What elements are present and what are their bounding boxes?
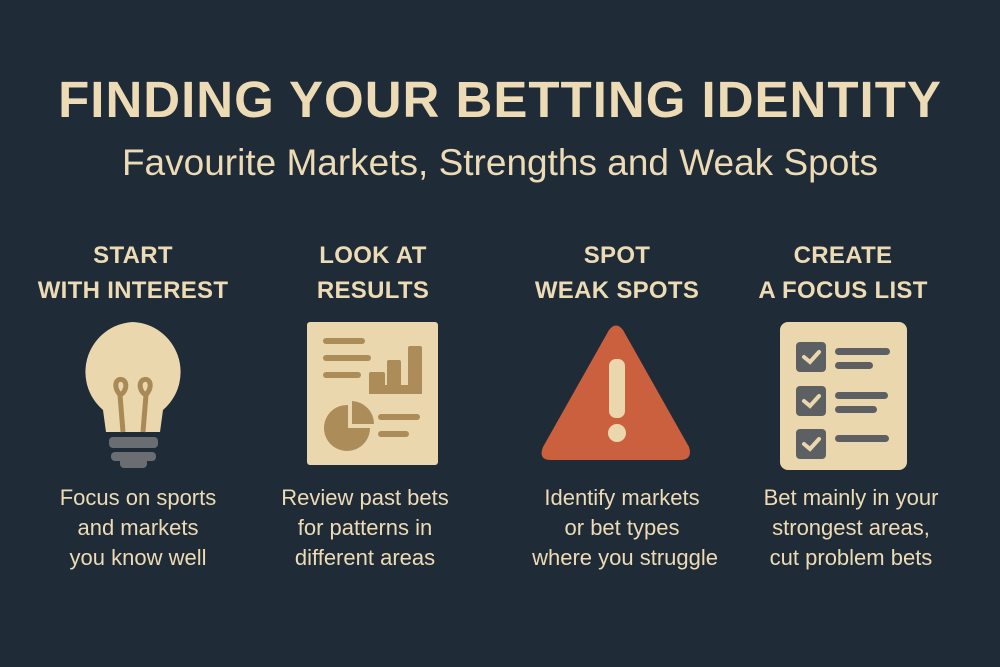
- heading: create: A FOCUS LIST: [758, 277, 928, 304]
- text: look: [281, 485, 449, 570]
- icon: checklist: [780, 322, 907, 470]
- icon: light bulb: [85, 322, 181, 468]
- text: create: strongest areas,: [772, 515, 930, 540]
- text: spot: [532, 485, 718, 570]
- text: start: and markets: [77, 515, 199, 540]
- heading: look: LOOK AT: [319, 242, 427, 269]
- text: start: Focus on sports: [60, 485, 216, 510]
- heading: look: [317, 242, 429, 304]
- text: start: you know well: [70, 545, 206, 570]
- heading: start: WITH INTEREST: [38, 277, 228, 304]
- heading: create: [758, 242, 928, 304]
- text: start: [60, 485, 216, 570]
- icon: warning triangle: [542, 326, 690, 460]
- heading: start: START: [93, 242, 173, 269]
- heading: spot: [534, 242, 699, 304]
- subtitle: Favourite Markets, Strengths and Weak Spots: [122, 142, 878, 183]
- heading: look: RESULTS: [317, 277, 429, 304]
- title: FINDING YOUR BETTING IDENTITY: [58, 71, 942, 128]
- text: look: for patterns in: [298, 515, 432, 540]
- heading: start: [38, 242, 228, 304]
- text: create: cut problem bets: [770, 545, 932, 570]
- heading: spot: SPOT: [584, 242, 650, 269]
- text: create: Bet mainly in your: [764, 485, 938, 510]
- text: spot: Identify markets: [544, 485, 700, 510]
- heading: spot: WEAK SPOTS: [535, 277, 699, 304]
- text: spot: or bet types: [565, 515, 679, 540]
- text: look: different areas: [295, 545, 435, 570]
- text: create: [764, 485, 938, 570]
- heading: create: CREATE: [794, 242, 892, 269]
- icon: report: [307, 322, 438, 465]
- text: spot: where you struggle: [532, 545, 718, 570]
- text: look: Review past bets: [281, 485, 449, 510]
